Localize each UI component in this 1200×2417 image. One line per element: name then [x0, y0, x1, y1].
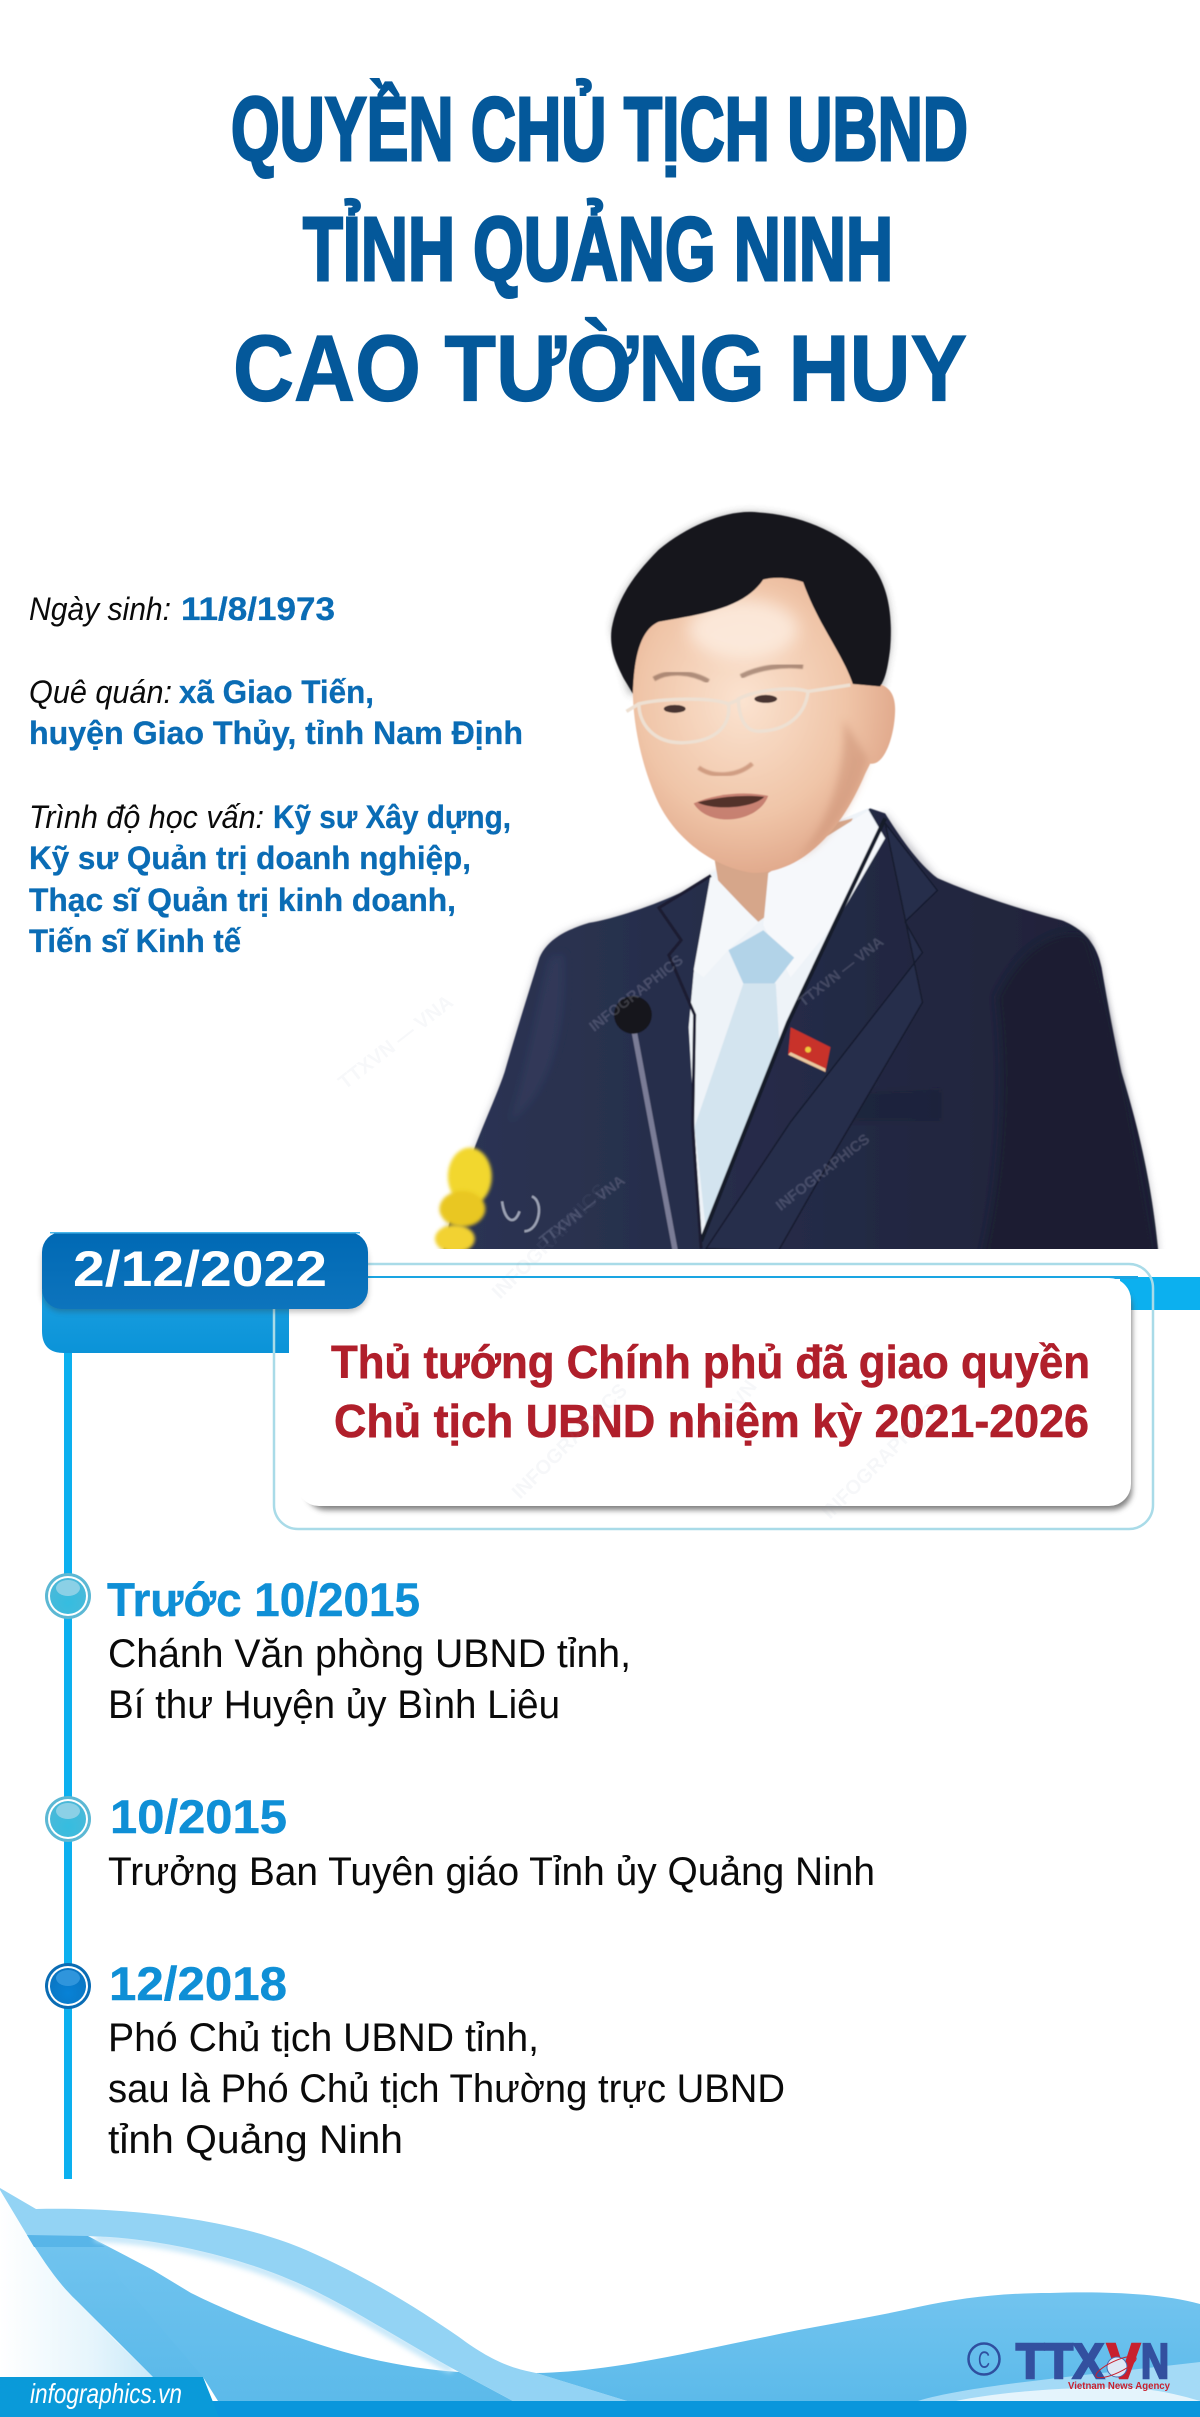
title — [231, 78, 968, 420]
card outline — [274, 1264, 1153, 1529]
hometown — [29, 674, 523, 751]
tie — [728, 930, 794, 983]
card text — [331, 1336, 1090, 1447]
timeline entry: 12/2018: tỉnh Quảng Ninh — [108, 2118, 403, 2162]
card shadow — [306, 1288, 1132, 1510]
shirt — [689, 808, 885, 1241]
glasses — [626, 685, 850, 743]
date badge — [42, 1232, 368, 1312]
logo: TTXVN: Vietnam News Agency — [1068, 2381, 1170, 2392]
hometown: huyện Giao Thủy, tỉnh Nam Định — [29, 715, 523, 751]
lapel pin flag — [788, 1027, 830, 1072]
timeline entry: Trước 10/2015: Trước 10/2015 — [107, 1573, 420, 1626]
timeline entry: 10/2015 — [45, 1790, 875, 1894]
education — [29, 799, 511, 959]
date of birth: 11/8/1973 — [181, 591, 335, 627]
watermarks on photo: TTXVN — VNA — [536, 1172, 629, 1249]
hometown: xã Giao Tiến, — [179, 674, 374, 710]
timeline entry: 10/2015: 10/2015 — [110, 1790, 287, 1843]
footer waves — [0, 2188, 1200, 2417]
biography — [29, 591, 523, 959]
white lens between waves — [88, 2236, 459, 2372]
title line 2: TỈNH QUẢNG NINH — [303, 198, 893, 300]
timeline line — [64, 1340, 72, 2179]
right connector bar — [1120, 1277, 1200, 1310]
date of birth — [29, 591, 335, 627]
globe — [1094, 2352, 1138, 2382]
portrait photo — [435, 512, 1159, 1256]
education: Tiến sĩ Kinh tế — [29, 923, 241, 959]
watermarks on photo: INFOGRAPHICS — [773, 1131, 873, 1214]
microphone — [614, 996, 676, 1256]
timeline entry: 12/2018: Phó Chủ tịch UBND tỉnh, — [108, 2016, 539, 2060]
card text: Chủ tịch UBND nhiệm kỳ 2021-2026 — [334, 1395, 1089, 1447]
node — [45, 1963, 91, 2009]
timeline entry: Trước 10/2015 — [45, 1573, 631, 1727]
education: Thạc sĩ Quản trị kinh doanh, — [29, 882, 456, 918]
nose and mouth — [694, 764, 768, 820]
source tab: infographics.vn — [30, 2378, 182, 2409]
education: Kỹ sư Quản trị doanh nghiệp, — [29, 840, 471, 876]
node — [45, 1573, 91, 1619]
faint watermarks: TTXVN — VNA — [335, 991, 458, 1094]
medium blue left wave — [27, 2235, 513, 2401]
left pale wedge — [0, 2190, 153, 2377]
card text: Thủ tướng Chính phủ đã giao quyền — [331, 1336, 1090, 1388]
timeline entry: 10/2015: Trưởng Ban Tuyên giáo Tỉnh ủy Quảng Ninh — [108, 1850, 875, 1894]
faint watermarks: INFOGRAPHICS — [818, 1400, 942, 1524]
timeline entry: 12/2018: 12/2018 — [109, 1957, 287, 2010]
faint watermarks: INFOGRAPHICS — [508, 1380, 632, 1504]
neck — [714, 818, 853, 922]
logo: TTXVN — [968, 2335, 1170, 2392]
light blue ribbon — [0, 2188, 627, 2401]
timeline entry: 12/2018: sau là Phó Chủ tịch Thường trực UBND — [108, 2067, 785, 2111]
watermarks on photo — [536, 933, 887, 1249]
logo: TTXVN: TTX — [1016, 2335, 1104, 2389]
copyright mark: C — [978, 2347, 990, 2374]
source tab — [0, 2377, 219, 2417]
hair — [611, 512, 891, 694]
eyebrows and eyes — [654, 666, 803, 713]
logo: TTXVN: V — [1107, 2335, 1140, 2389]
education: Kỹ sư Xây dựng, — [273, 799, 511, 835]
logo: TTXVN: N — [1141, 2335, 1169, 2389]
suit jacket — [442, 808, 1159, 1256]
bottom band — [0, 2401, 1200, 2417]
date badge: 2/12/2022 — [73, 1241, 327, 1297]
hometown: Quê quán: — [29, 674, 172, 710]
faint watermarks: TTXVN — [706, 1377, 762, 1443]
watermarks on photo: INFOGRAPHICS — [586, 952, 687, 1035]
copyright mark — [968, 2344, 1000, 2374]
right wave — [536, 2292, 1200, 2401]
timeline entry: Trước 10/2015: Bí thư Huyện ủy Bình Liêu — [108, 1683, 560, 1727]
faint watermarks: INFOGRAPHICS — [488, 1180, 612, 1304]
white card — [297, 1278, 1131, 1506]
watermarks on photo: TTXVN — VNA — [795, 933, 887, 1011]
date tab lower — [42, 1290, 289, 1353]
faint watermarks — [335, 991, 942, 1524]
date of birth: Ngày sinh: — [29, 591, 171, 627]
lapels — [706, 823, 937, 1251]
callout: appointment 2/12/2022 — [42, 1232, 1200, 1529]
node — [45, 1796, 91, 1842]
timeline entry: 12/2018 — [45, 1957, 785, 2162]
timeline entry: Trước 10/2015: Chánh Văn phòng UBND tỉnh, — [108, 1632, 631, 1676]
face — [633, 576, 895, 873]
title line 3: name: CAO TƯỜNG HUY — [233, 316, 967, 420]
flowers — [435, 1148, 539, 1253]
education: Trình độ học vấn: — [29, 799, 264, 835]
